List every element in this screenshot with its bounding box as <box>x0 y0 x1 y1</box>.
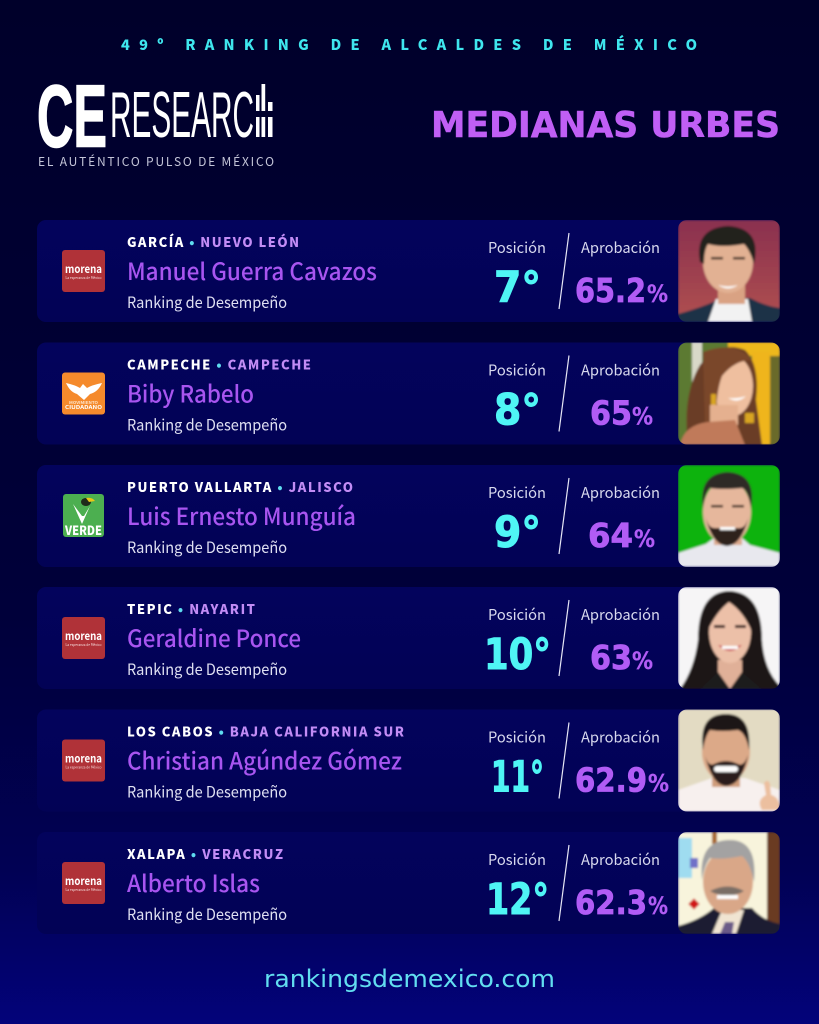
icon: Verde logo: VERDE <box>64 520 102 539</box>
logo: CE Research: CE <box>37 66 107 166</box>
subtitle: Ranking de Desempeño <box>127 903 287 925</box>
icon: Verde logo <box>63 494 104 539</box>
icon: Movimiento Ciudadano logo <box>62 372 105 414</box>
approval: % <box>648 770 669 798</box>
approval: % <box>634 525 655 553</box>
approval: % <box>632 647 653 675</box>
approval: % <box>648 892 668 920</box>
subtitle: Ranking de Desempeño <box>127 414 287 436</box>
approval <box>575 726 669 800</box>
panel: Tepic <box>37 587 780 689</box>
subtitle: Ranking de Desempeño <box>127 291 287 313</box>
portrait: Alberto Islas <box>678 832 780 934</box>
position: 8° <box>494 386 541 436</box>
panel: Xalapa <box>37 832 780 934</box>
icon: morena logo <box>62 617 105 659</box>
approval: 63 <box>590 638 632 677</box>
portrait: Biby Rabelo <box>678 342 780 445</box>
icon: morena logo <box>62 250 105 292</box>
icon: morena logo: morena <box>65 750 102 766</box>
position: 10° <box>484 630 551 680</box>
icon: morena logo: La esperanza de México <box>66 887 102 893</box>
location: GARCÍA • NUEVO LEÓN <box>127 232 299 251</box>
approval: Aprobación <box>581 482 660 503</box>
subtitle: Ranking de Desempeño <box>127 780 287 802</box>
approval <box>581 604 660 677</box>
panel: Los Cabos <box>37 709 780 812</box>
approval <box>581 482 660 555</box>
position <box>488 482 546 558</box>
location: LOS CABOS • BAJA CALIFORNIA SUR <box>127 722 404 740</box>
approval <box>575 849 668 922</box>
location: CAMPECHE • CAMPECHE <box>127 354 311 374</box>
approval: 65 <box>590 394 632 432</box>
location: PUERTO VALLARTA • JALISCO <box>127 477 353 496</box>
name: Alberto Islas <box>127 865 260 899</box>
position: Posición <box>488 849 546 870</box>
position: 11° <box>491 752 544 802</box>
name: Biby Rabelo <box>127 376 254 410</box>
position: 12° <box>486 875 549 925</box>
location: XALAPA • VERACRUZ <box>127 844 283 863</box>
approval: 65.2 <box>575 271 646 310</box>
approval: Aprobación <box>581 237 660 258</box>
subtitle: Ranking de Desempeño <box>127 658 287 680</box>
approval: Aprobación <box>581 360 660 380</box>
portrait: Manuel Guerra <box>678 220 780 322</box>
position: Posición <box>488 360 546 380</box>
approval <box>575 237 668 310</box>
position <box>488 360 546 436</box>
position: Posición <box>488 237 546 258</box>
position: Posición <box>488 726 546 748</box>
icon: morena logo <box>62 740 105 782</box>
icon: Movimiento Ciudadano logo: MOVIMIENTO <box>69 400 98 406</box>
approval: % <box>647 280 668 308</box>
top heading: 49º RANKING DE ALCALDES DE MÉXICO <box>121 34 697 55</box>
portrait: Christian Agúndez <box>678 709 780 812</box>
approval <box>581 360 660 432</box>
logo: CE Research: RESEARC <box>110 78 254 151</box>
icon: morena logo: morena <box>65 261 102 277</box>
panel: García <box>37 220 780 322</box>
approval: Aprobación <box>581 726 660 748</box>
panel: Puerto Vallarta <box>37 465 780 567</box>
approval: 62.9 <box>575 760 647 800</box>
portrait: Geraldine Ponce <box>678 587 780 689</box>
name: Geraldine Ponce <box>127 620 301 654</box>
position <box>488 237 546 313</box>
position <box>486 849 549 925</box>
name: Manuel Guerra Cavazos <box>127 253 377 287</box>
icon: morena logo: La esperanza de México <box>66 764 102 770</box>
logo tagline: EL AUTÉNTICO PULSO DE MÉXICO <box>38 153 274 170</box>
footer url: rankingsdemexico.com <box>264 965 555 993</box>
position: 9° <box>494 508 541 558</box>
section title: MEDIANAS URBES <box>431 105 780 146</box>
position: Posición <box>488 604 546 625</box>
location: TEPIC • NAYARIT <box>127 599 255 618</box>
position <box>484 604 551 680</box>
name: Christian Agúndez Gómez <box>127 742 402 776</box>
subtitle: Ranking de Desempeño <box>127 536 287 558</box>
approval: Aprobación <box>581 604 660 625</box>
icon: morena logo: La esperanza de México <box>66 642 102 648</box>
name: Luis Ernesto Munguía <box>127 498 356 532</box>
position: Posición <box>488 482 546 503</box>
position: 7° <box>494 263 541 313</box>
approval: Aprobación <box>581 849 660 870</box>
logo: CE Research <box>37 66 272 166</box>
approval: 62.3 <box>575 883 647 922</box>
approval: % <box>632 402 653 430</box>
icon: morena logo: morena <box>65 628 102 644</box>
position <box>488 726 546 802</box>
approval: 64 <box>588 516 633 555</box>
icon: morena logo <box>62 862 105 904</box>
icon: morena logo: morena <box>65 873 102 889</box>
icon: Movimiento Ciudadano logo: CIUDADANO <box>65 404 102 411</box>
icon: morena logo: La esperanza de México <box>66 275 102 281</box>
panel: Campeche <box>37 342 780 445</box>
portrait: Luis Munguía <box>678 465 780 567</box>
